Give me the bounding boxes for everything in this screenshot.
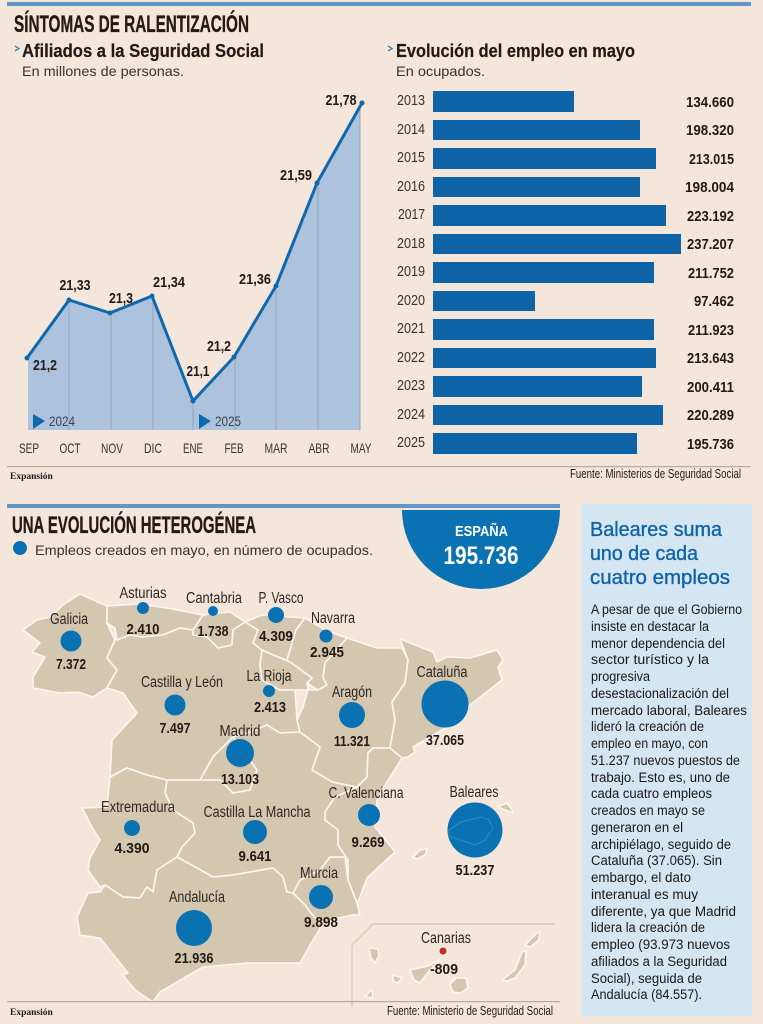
sidebar body text: diferente, ya que Madrid — [591, 904, 736, 919]
bar values: 198.004 — [685, 179, 735, 196]
area chart — [24, 100, 364, 430]
bar values — [685, 94, 735, 453]
value labels: 21,1 — [186, 363, 210, 380]
region values: 7.497 — [160, 720, 190, 737]
sidebar body text: archipiélago, seguido de — [591, 837, 731, 852]
sidebar body text: A pesar de que el Gobierno — [591, 602, 742, 617]
month axis: NOV — [101, 440, 123, 456]
source: ministerio: Fuente: Ministerio de Seguridad Social — [387, 1003, 553, 1018]
region values: 9.269 — [352, 834, 384, 851]
year labels — [397, 93, 425, 451]
region names: Baleares — [450, 784, 499, 801]
region: Madrid — [200, 737, 257, 793]
heading: afiliados: Afiliados a la Seguridad Social — [22, 40, 264, 61]
bar values: 134.660 — [686, 94, 734, 111]
sidebar body text: embargo, el dato — [591, 870, 691, 885]
year labels: 2021 — [397, 321, 425, 337]
sidebar headline — [590, 518, 730, 589]
year labels: 2022 — [397, 350, 425, 366]
credit: Expansión: Expansión — [10, 1008, 53, 1018]
bar values: 213.643 — [687, 350, 734, 367]
bar values: 211.752 — [688, 265, 734, 282]
region names: Cataluña — [416, 664, 468, 681]
region names: P. Vasco — [258, 590, 304, 607]
bar values: 213.015 — [689, 151, 734, 168]
subheading: en ocupados: En ocupados. — [396, 63, 485, 79]
year labels: 2023 — [397, 378, 425, 394]
month axis: DIC — [144, 440, 162, 456]
year labels: 2025 — [397, 435, 425, 451]
region: Asturias — [107, 604, 203, 640]
month axis: ENE — [183, 440, 203, 456]
panel: Baleares sidebar — [581, 504, 752, 1016]
month axis: OCT — [60, 440, 81, 456]
region: Murcia — [293, 857, 360, 925]
year labels: 2015 — [397, 150, 425, 166]
bar values: 220.289 — [687, 407, 734, 424]
region: Aragón — [297, 638, 408, 787]
region names: Castilla La Mancha — [204, 804, 311, 821]
value labels: 21,33 — [60, 277, 90, 294]
region names: Murcia — [300, 865, 338, 882]
year marker 2025 — [199, 414, 241, 429]
year labels: 2024 — [397, 407, 425, 423]
region names: Andalucía — [169, 889, 225, 906]
sidebar body text: sector turístico y la — [591, 652, 710, 667]
bar values: 211.923 — [688, 322, 734, 339]
month axis: MAY — [350, 440, 372, 456]
year marker 2024 — [33, 414, 75, 429]
year labels: 2018 — [397, 236, 425, 252]
panel: afiliados line chart — [15, 40, 372, 456]
region names: La Rioja — [246, 668, 292, 685]
region names — [50, 585, 499, 947]
callout: España total: 195.736 — [444, 542, 518, 570]
region names: Extremadura — [101, 799, 175, 816]
sidebar body text: afiliados a la Seguridad — [591, 954, 727, 969]
region values: 2.945 — [310, 644, 344, 661]
sidebar body text: creados en mayo se — [591, 803, 705, 818]
bar values: 237.207 — [687, 236, 734, 253]
sidebar body text — [591, 602, 747, 1002]
bubbles — [60, 602, 502, 954]
map of Spain — [23, 594, 555, 1006]
region: Andalucía — [77, 857, 322, 1002]
sidebar headline: cuatro empleos — [590, 566, 730, 589]
region: Castilla y León — [107, 622, 300, 780]
region values: 21.936 — [174, 950, 214, 967]
credit: Expansión: Expansión — [10, 472, 53, 482]
year marker 2024: 2024 — [49, 414, 75, 429]
region values: -809 — [430, 961, 458, 978]
region: Comunidad Valenciana — [325, 748, 402, 903]
region values: 51.237 — [456, 862, 494, 879]
region values — [56, 621, 494, 978]
sidebar body text: cada cuatro empleos — [591, 786, 712, 801]
region: Menorca — [497, 803, 513, 813]
value labels: 21,59 — [280, 167, 312, 184]
month axis: FEB — [224, 440, 244, 456]
region names: Asturias — [120, 585, 167, 602]
region values: 9.898 — [304, 914, 338, 931]
region values: 1.738 — [198, 623, 228, 640]
sidebar body text: 51.237 nuevos puestos de — [591, 753, 740, 768]
sidebar body text: generaron en el — [591, 820, 683, 835]
sidebar body text: lideró la creación de — [591, 719, 704, 734]
month axis: ABR — [308, 440, 330, 456]
bar values: 198.320 — [686, 122, 734, 139]
value labels: 21,3 — [109, 290, 133, 307]
bars — [433, 91, 681, 454]
sidebar body text: trabajo. Esto es, uno de — [591, 770, 730, 785]
subheading: unidades afiliados: En millones de personas. — [22, 63, 184, 79]
sidebar body text: interanual es muy — [591, 887, 698, 902]
sidebar body text: Social), seguida de — [591, 971, 702, 986]
year labels: 2014 — [397, 122, 425, 138]
sidebar body text: Cataluña (37.065). Sin — [591, 853, 722, 868]
region names: Navarra — [311, 610, 355, 627]
sidebar body text: insiste en destacar la — [591, 619, 709, 634]
region: Navarra — [287, 618, 347, 690]
region names: C. Valenciana — [328, 785, 404, 802]
title: síntomas de ralentización: SÍNTOMAS DE RALENTIZACIÓN — [14, 10, 249, 38]
bar values: 200.411 — [687, 379, 734, 396]
year labels: 2017 — [398, 207, 425, 223]
region values: 2.413 — [254, 699, 286, 716]
islands: Canarias — [365, 931, 540, 998]
region names: Castilla y León — [141, 674, 223, 691]
region values: 11.321 — [334, 733, 370, 750]
sidebar headline: Baleares suma — [590, 518, 723, 541]
region names: Cantabria — [186, 590, 242, 607]
region values: 7.372 — [56, 656, 86, 673]
legend: Empleos creados en mayo, en número de ocupados. — [35, 542, 373, 558]
year labels: 2020 — [397, 293, 425, 309]
sidebar body text: progresiva — [591, 669, 650, 684]
sidebar body text: mercado laboral, Baleares — [591, 703, 747, 718]
region names: Galicia — [50, 611, 88, 628]
heading: evolución del empleo: Evolución del empleo en mayo — [396, 40, 635, 61]
region values: 9.641 — [238, 848, 272, 865]
region values: 4.390 — [114, 840, 150, 857]
callout: España total — [402, 510, 560, 589]
sidebar body text: menor dependencia del — [591, 636, 725, 651]
sidebar body text: empleo en mayo, con — [591, 736, 708, 751]
value labels — [33, 92, 356, 380]
year labels: 2019 — [397, 264, 425, 280]
region values: 37.065 — [426, 732, 464, 749]
value labels: 21,78 — [326, 92, 356, 109]
value labels: 21,2 — [207, 338, 231, 355]
sidebar body text: empleo (93.973 nuevos — [591, 937, 730, 952]
sidebar headline: uno de cada — [590, 542, 699, 565]
canaries frame — [352, 924, 555, 1006]
region names: Aragón — [332, 684, 372, 701]
value labels: 21,2 — [33, 357, 57, 374]
bar values: 223.192 — [687, 208, 734, 225]
bar values: 97.462 — [694, 293, 734, 310]
title: una evolución heterogénea: UNA EVOLUCIÓN HETEROGÉNEA — [12, 511, 256, 539]
year labels: 2013 — [397, 93, 425, 109]
region: La Rioja — [260, 650, 312, 690]
month axis — [19, 440, 372, 456]
bar values: 195.736 — [687, 436, 734, 453]
region values: 2.410 — [126, 621, 160, 638]
region: Castilla-La Mancha — [165, 725, 357, 893]
month axis: MAR — [264, 440, 288, 456]
sidebar body text: lidera la creación de — [591, 920, 705, 935]
sidebar body text: desestacionalización del — [591, 686, 729, 701]
value labels: 21,34 — [153, 274, 186, 291]
region: Ibiza — [413, 849, 427, 859]
region names: Canarias — [421, 930, 471, 947]
panel: empleo bar chart — [388, 40, 735, 454]
year marker 2025: 2025 — [215, 414, 241, 429]
callout: España total: ESPAÑA — [455, 522, 508, 540]
region values: 13.103 — [221, 771, 259, 788]
month axis: SEP — [19, 440, 39, 456]
region: Cantabria — [193, 612, 245, 648]
region values: 4.309 — [259, 628, 293, 645]
region: Cataluña — [390, 639, 503, 758]
value labels: 21,36 — [239, 271, 271, 288]
region names: Madrid — [220, 723, 260, 740]
sidebar body text: Andalucía (84.557). — [591, 987, 702, 1002]
region: País Vasco — [245, 615, 305, 660]
region: Extremadura — [82, 768, 195, 898]
region: Galicia — [23, 594, 117, 697]
year labels: 2016 — [397, 179, 425, 195]
